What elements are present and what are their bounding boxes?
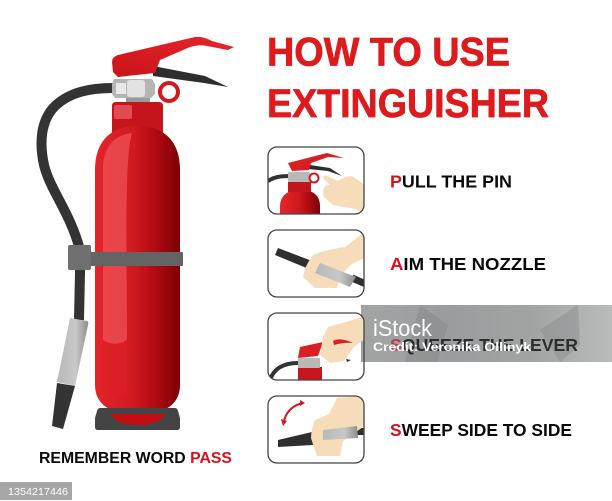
panel: squeeze the lever	[268, 313, 366, 382]
top lever	[112, 37, 234, 77]
watermark credit	[373, 315, 531, 354]
safety pin ring	[160, 83, 178, 101]
strap buckle	[68, 245, 91, 270]
nozzle grip	[57, 318, 88, 386]
cylinder highlight	[103, 133, 132, 344]
strap	[90, 252, 183, 266]
panel: sweep side to side	[268, 396, 366, 463]
lower lever	[153, 66, 228, 87]
step label: aim the nozzle: AIM THE NOZZLE	[390, 254, 546, 274]
panel: aim the nozzle	[268, 230, 366, 297]
sweep arrow	[284, 403, 303, 421]
watermark banner background	[361, 305, 612, 362]
cylinder neck	[112, 102, 163, 134]
step label: squeeze the lever: SQUEEZE THE LEVER	[390, 335, 578, 355]
cylinder body	[95, 126, 180, 412]
hose	[42, 88, 113, 320]
step label: pull the pin: PULL THE PIN	[390, 172, 512, 192]
title	[267, 30, 549, 126]
base	[95, 408, 180, 430]
panel: pull the pin	[268, 147, 366, 214]
step label: sweep side to side: SWEEP SIDE TO SIDE	[390, 420, 572, 440]
valve stem	[126, 96, 150, 102]
title: EXTINGUISHER	[267, 82, 549, 126]
title: HOW TO USE	[267, 30, 510, 74]
watermark credit: Credit: Veronika Ollinyk	[373, 340, 531, 354]
watermark credit: iStock	[373, 315, 432, 341]
image id tag: 1354217446	[8, 486, 68, 498]
icon: fire extinguisher	[42, 37, 234, 430]
caption: remember word pass: REMEMBER WORD PASS	[39, 450, 232, 467]
valve collar	[112, 79, 155, 98]
nozzle tip	[52, 383, 75, 429]
image id tag	[0, 482, 72, 500]
